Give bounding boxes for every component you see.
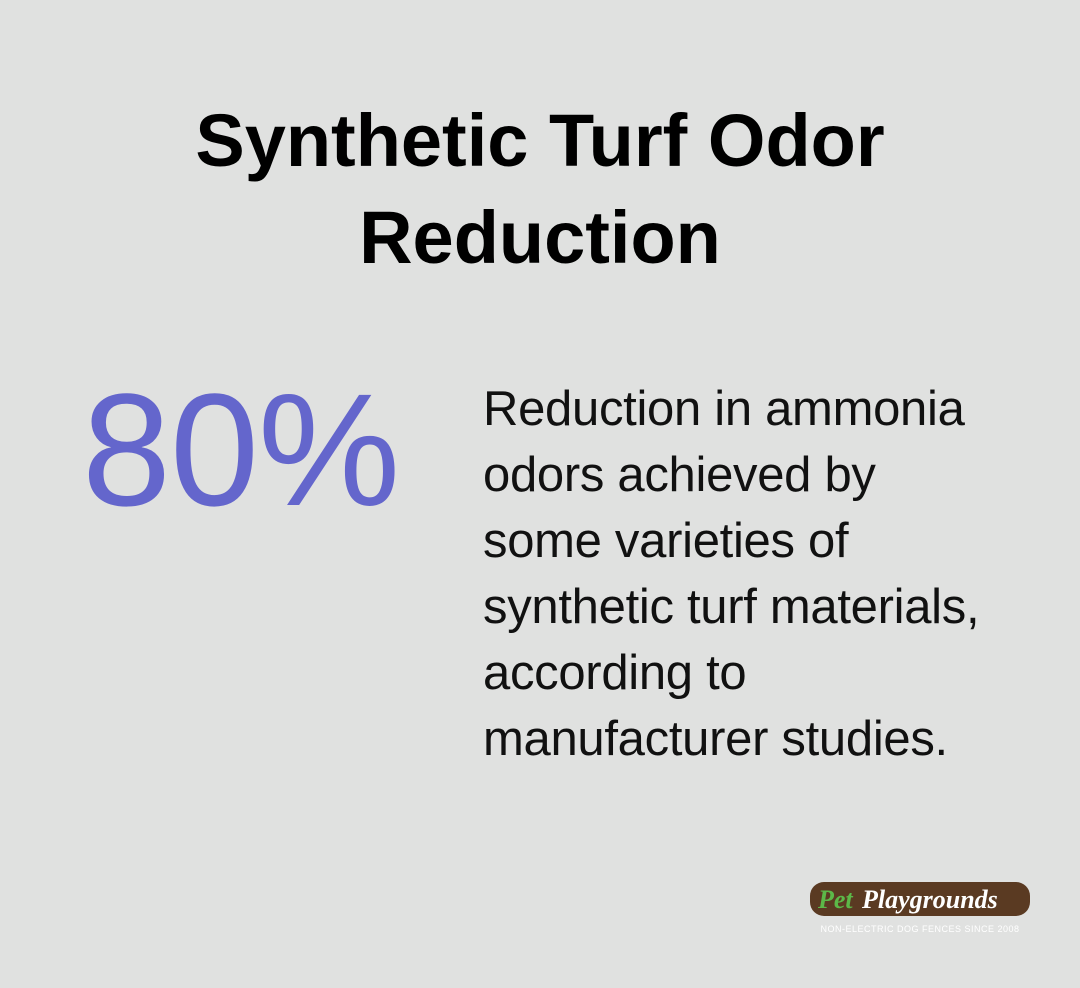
description text: some varieties of	[483, 514, 848, 568]
title: Synthetic Turf Odor	[195, 99, 885, 182]
description text: odors achieved by	[483, 448, 876, 502]
description text: according to	[483, 646, 746, 700]
description text: Reduction in ammonia	[483, 382, 965, 436]
description text	[483, 382, 979, 766]
description text: manufacturer studies.	[483, 712, 948, 766]
logo: NON-ELECTRIC DOG FENCES SINCE 2008	[820, 924, 1020, 934]
logo: Playgrounds	[861, 885, 998, 914]
stat number: 80%	[82, 360, 399, 539]
title	[195, 99, 885, 279]
description text: synthetic turf materials,	[483, 580, 979, 634]
logo	[810, 882, 1030, 934]
logo: Pet	[817, 885, 853, 914]
title: Reduction	[359, 196, 721, 279]
